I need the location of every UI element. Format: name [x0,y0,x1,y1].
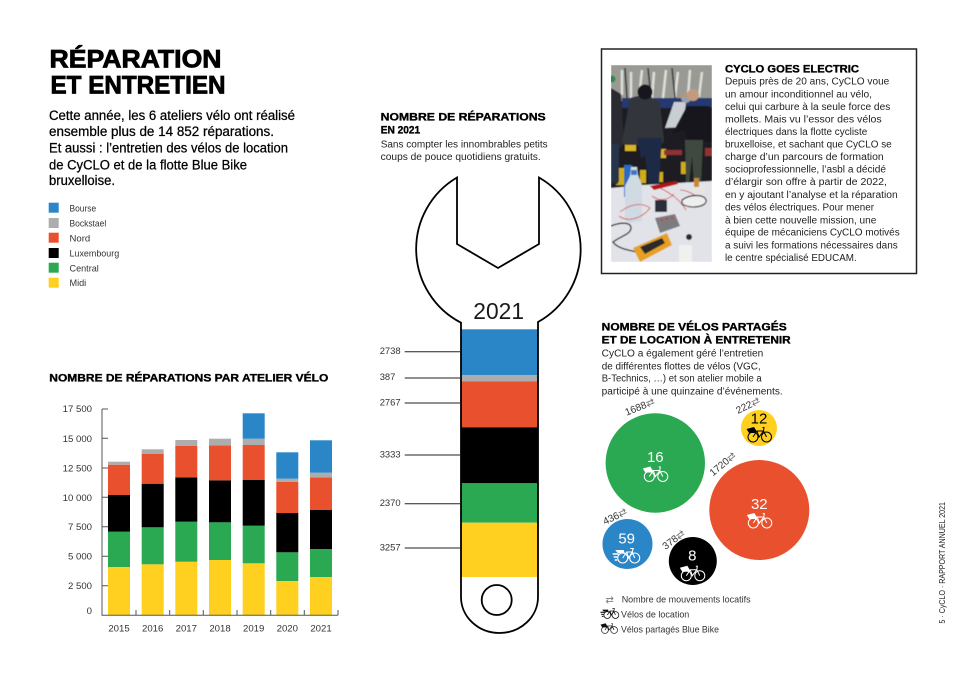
y axis labels [63,404,92,617]
legend: bikes: Nombre de mouvements locatifs [622,595,751,606]
title [50,45,226,99]
wrench values: 387 [380,372,395,383]
y axis labels: 10 000 [63,493,92,504]
wrench hole [482,585,512,615]
legend: bikes: ⇄ [606,595,614,606]
heading: réparations 2021: coups de pouce quotidiens gratuits. [381,152,541,163]
legend: bikes [600,595,751,635]
intro text: Et aussi : l’entretien des vélos de location [49,141,288,156]
intro text: Cette année, les 6 ateliers vélo ont réalisé [49,108,295,123]
bubble: green 16 [606,396,705,513]
bubble: yellow 12: 12 [751,410,767,427]
legend: ateliers: Nord [70,234,90,244]
bubble: yellow 12: 222⇄ [734,395,762,417]
intro text: de CyCLO et de la flotte Blue Bike [49,157,247,172]
legend: bikes: Vélos partagés Blue Bike [621,624,719,635]
bar 2021 [310,440,332,615]
wrench values: 3257 [380,543,401,554]
heading: vélos partagés: participé à une quinzaine d’événements. [602,386,783,397]
wrench chart [380,178,581,633]
y axis labels: 12 500 [63,464,92,475]
bubble: black 8 [660,527,717,585]
wrench values: 2370 [380,498,401,509]
x axis labels: 2018 [209,624,231,635]
footer: page note: 5 · CyCLO · RAPPORT ANNUEL 2021 [938,502,947,624]
legend: ateliers: Central [70,264,99,274]
panel body text: un amour inconditionnel au vélo, [725,89,872,100]
y axis labels: 17 500 [63,404,92,415]
bar 2018 [209,439,231,615]
panel: cyclo goes electric [602,49,916,274]
panel body text: mollets. Mais vu l’essor des vélos [725,114,882,125]
bubble: red 32: 32 [751,496,768,513]
bubble: red 32: 1720⇄ [707,450,739,479]
panel body text: Depuis près de 20 ans, CyCLO voue [725,76,890,87]
y axis labels: 5 000 [68,552,92,563]
y axis labels: 7 500 [68,522,92,533]
heading: vélos partagés: de différentes flottes de vélos (VGC, [602,361,761,372]
wrench year: 2021 [473,298,524,324]
panel body text: en y ajoutant l’analyse et la réparation [725,190,898,201]
bar 2017 [175,440,197,615]
wrench values: 2738 [380,346,401,357]
heading: vélos partagés: CyCLO a également géré l’entretien [602,349,763,360]
bubble: green 16: 1688⇄ [623,396,657,418]
x axis labels: 2020 [277,624,298,635]
intro text: ensemble plus de 14 852 réparations. [49,124,274,139]
bubble: black 8: 378⇄ [660,527,688,552]
legend: ateliers: Midi [70,278,86,289]
wrench values: 2767 [380,398,401,409]
y axis labels: 0 [87,606,92,617]
x axis labels: 2016 [142,624,163,635]
legend: ateliers [49,203,119,289]
bar 2019 [243,413,265,615]
heading: vélos partagés [602,321,791,397]
wrench leaders [405,352,461,548]
bubble: black 8: 8 [688,548,696,565]
bubble: blue 59: 59 [618,531,635,548]
heading: vélos partagés: NOMBRE DE VÉLOS PARTAGÉS [602,321,787,334]
bubble: red 32 [707,450,809,560]
bubble: blue 59 [601,506,652,569]
legend: bikes: Vélos de location [621,609,689,620]
panel body text [725,76,900,264]
panel body text: bruxelloise, et sachant que CyCLO se [725,139,892,150]
heading: réparations 2021: EN 2021 [381,125,420,137]
panel body text: à bien cette nouvelle mission, une [725,215,877,226]
wrench values [380,346,401,554]
wrench values: 3333 [380,450,401,461]
x axis labels: 2017 [176,624,197,635]
heading: réparations 2021: Sans compter les innombrables petits [381,140,548,151]
bar 2016 [142,449,164,615]
panel body text: le centre spécialisé EDUCAM. [725,253,857,264]
x axis labels [108,624,332,635]
bar chart [63,404,338,635]
panel body text: a suivi les formations nécessaires dans [725,240,898,251]
y axis labels: 2 500 [68,581,92,592]
panel body text: équipe de mécaniciens CyCLO motivés [725,228,900,239]
title: RÉPARATION [50,45,222,74]
heading: réparations 2021: NOMBRE DE RÉPARATIONS [381,110,546,123]
x axis labels: 2019 [243,624,264,635]
heading: bar chart: NOMBRE DE RÉPARATIONS PAR ATELIER VÉLO [49,372,328,385]
panel body text: socioprofessionnelle, l’asbl a décidé [725,164,886,175]
bubble: blue 59: 436⇄ [601,506,629,528]
bar 2015 [108,462,130,615]
title: ET ENTRETIEN [50,71,226,99]
bar 2020 [276,452,298,615]
bubble: green 16: 16 [647,449,664,466]
intro text: bruxelloise. [49,173,115,188]
photo: workshop [608,65,712,262]
heading: réparations 2021 [381,110,548,163]
legend: ateliers: Luxembourg [70,248,119,260]
wrench outline [416,178,581,633]
x axis labels: 2021 [310,624,332,635]
heading: vélos partagés: ET DE LOCATION À ENTRETENIR [602,333,791,346]
panel body text: celui qui carbure à la seule force des [725,102,890,113]
bubble: yellow 12 [734,395,777,446]
wrench segments [461,329,538,577]
panel heading: CYCLO GOES ELECTRIC [725,63,859,75]
y axis labels: 15 000 [63,434,92,445]
heading: vélos partagés: B-Technics, …) et son atelier mobile a [602,374,762,385]
intro text [49,108,295,188]
legend: ateliers: Bockstael [70,218,106,230]
panel body text: des vélos électriques. Pour mener [725,202,875,213]
panel body text: d’élargir son offre à partir de 2022, [725,177,887,188]
panel body text: charge d’un parcours de formation [725,152,884,163]
legend: ateliers: Bourse [70,204,96,215]
x axis labels: 2015 [108,624,130,635]
panel body text: électriques dans la flotte cycliste [725,127,868,138]
